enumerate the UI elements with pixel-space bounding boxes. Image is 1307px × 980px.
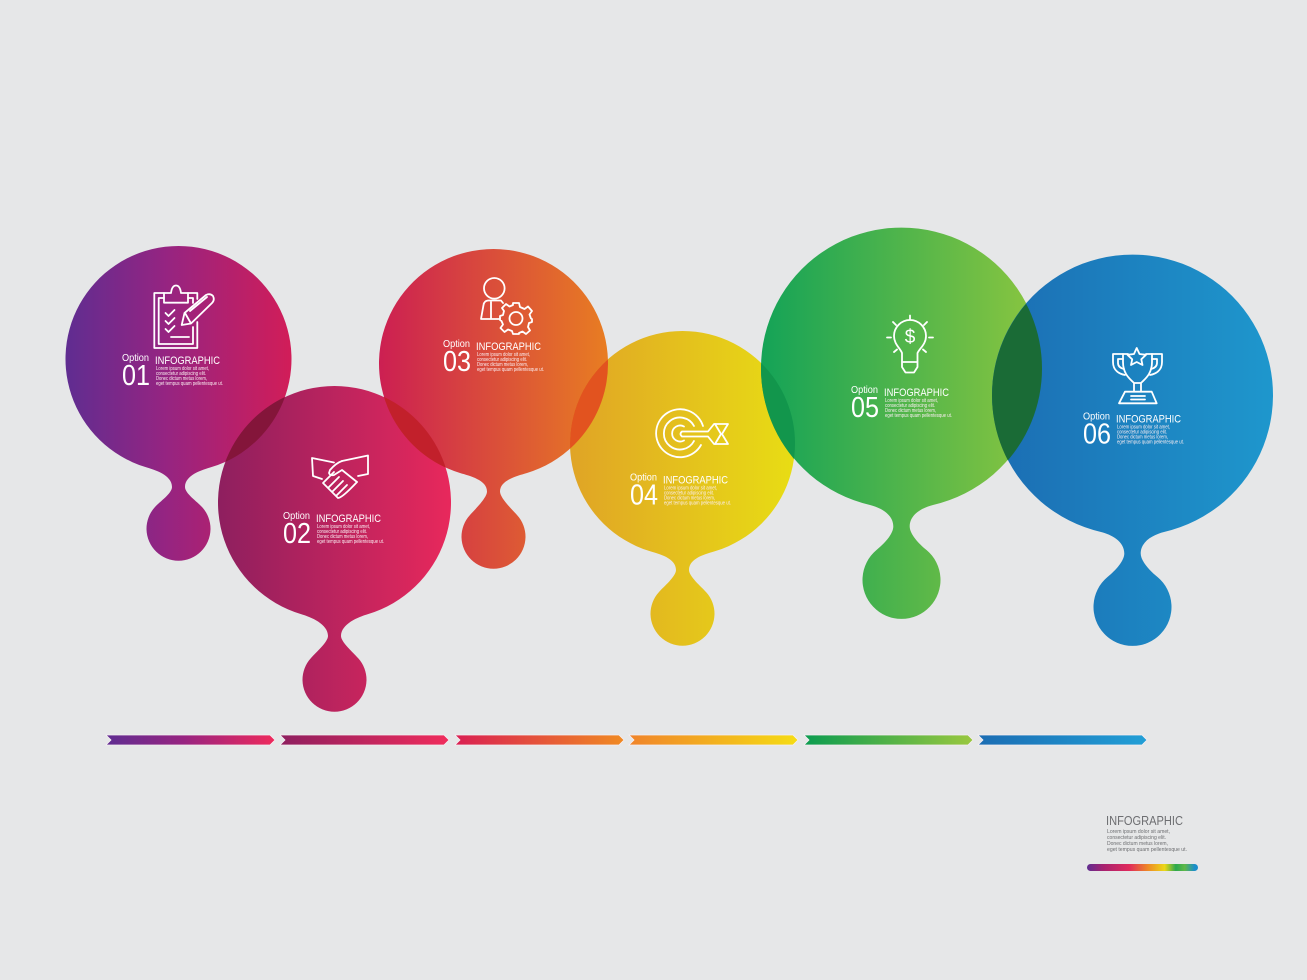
text: option 05	[851, 384, 952, 424]
overlap: bubbles 04 and 05	[761, 363, 795, 459]
panel: option 02	[218, 386, 451, 712]
text: option 03: INFOGRAPHIC	[476, 341, 541, 353]
arrow 6	[978, 735, 1147, 745]
text: option 02: Option	[283, 510, 310, 522]
text: option 01: eget tempus quam pellentesque ut.	[156, 381, 223, 387]
bubble 02	[218, 386, 451, 712]
bottom-right legend text: Donec dictum metus lorem,	[1107, 841, 1168, 847]
arrow 4	[629, 735, 798, 745]
panel: option 06	[992, 255, 1273, 646]
text: option 06: consectetur adipiscing elit.	[1117, 430, 1167, 436]
text: option 06: eget tempus quam pellentesque ut.	[1117, 440, 1184, 446]
bottom-right legend text: INFOGRAPHIC	[1106, 814, 1183, 828]
timeline arrows	[106, 735, 1147, 745]
text: option 06: Lorem ipsum dolor sit amet,	[1117, 424, 1170, 430]
text: option 06	[1083, 410, 1184, 450]
text: option 02: Lorem ipsum dolor sit amet,	[317, 524, 370, 530]
icon: trophy with star	[1113, 348, 1162, 403]
text: option 04: INFOGRAPHIC	[663, 474, 728, 486]
text: option 04: eget tempus quam pellentesque ut.	[664, 500, 731, 506]
text: option 01: INFOGRAPHIC	[155, 355, 220, 367]
bubble 05	[761, 228, 1042, 619]
text: option 04: 04	[630, 480, 658, 512]
text: option 01: Option	[122, 352, 149, 364]
text: option 02: consectetur adipiscing elit.	[317, 529, 367, 535]
text: option 01: consectetur adipiscing elit.	[156, 371, 206, 377]
icon: person with gear	[481, 278, 532, 334]
overlap: bubbles 01 and 02	[225, 397, 285, 462]
text: option 06: Option	[1083, 410, 1110, 422]
text: option 04: consectetur adipiscing elit.	[664, 490, 714, 496]
text: option 01: Lorem ipsum dolor sit amet,	[156, 366, 209, 372]
text: option 04: Donec dictum metus lorem,	[664, 496, 715, 502]
panel: option 04	[570, 331, 795, 646]
panel: option 05	[761, 228, 1042, 619]
text: option 05: Donec dictum metus lorem,	[885, 408, 936, 414]
arrow 1	[106, 735, 275, 745]
arrow 2	[280, 735, 449, 745]
text: option 04	[630, 472, 731, 512]
text: option 05: INFOGRAPHIC	[884, 387, 949, 399]
bubble 01	[66, 246, 292, 561]
text: option 05: 05	[851, 392, 879, 424]
text: option 02	[283, 510, 384, 550]
arrow 5	[804, 735, 973, 745]
text: option 05: Lorem ipsum dolor sit amet,	[885, 398, 938, 404]
panel: option 01	[66, 246, 292, 561]
text: option 03: consectetur adipiscing elit.	[477, 357, 527, 363]
text: option 01: 01	[122, 360, 150, 392]
bottom-right legend text: Lorem ipsum dolor sit amet,	[1107, 829, 1170, 835]
bottom-right legend text: consectetur adipiscing elit.	[1107, 835, 1166, 841]
text: option 01: Donec dictum metus lorem,	[156, 376, 207, 382]
bubble 06	[992, 255, 1273, 646]
icon: clipboard with pencil	[154, 286, 214, 348]
text: option 04: Option	[630, 472, 657, 484]
text: option 04: Lorem ipsum dolor sit amet,	[664, 486, 717, 492]
overlap: bubbles 02 and 03	[384, 397, 446, 468]
icon: handshake	[312, 456, 368, 498]
text: option 02: Donec dictum metus lorem,	[317, 534, 368, 540]
overlap: bubbles 05 and 06	[992, 304, 1042, 460]
icon: target with arrow	[656, 409, 728, 457]
arrow 3	[455, 735, 624, 745]
bubble 04	[570, 331, 795, 646]
text: option 05: consectetur adipiscing elit.	[885, 403, 935, 409]
text: option 03: Option	[443, 338, 470, 350]
text: option 01	[122, 352, 223, 392]
bottom-right legend text: eget tempus quam pellentesque ut.	[1107, 847, 1187, 853]
panel: option 03	[379, 249, 608, 569]
text: option 02: eget tempus quam pellentesque ut.	[317, 539, 384, 545]
text: option 05: eget tempus quam pellentesque ut.	[885, 413, 952, 419]
bottom-right legend text	[1106, 814, 1187, 853]
text: option 05: Option	[851, 384, 878, 396]
icon: light bulb with dollar: $	[905, 327, 916, 348]
icon: light bulb with dollar	[887, 316, 933, 372]
text: option 06: 06	[1083, 418, 1111, 450]
rainbow legend bar	[1087, 864, 1198, 871]
overlap: bubbles 03 and 04	[570, 359, 608, 448]
bubble 03	[379, 249, 608, 569]
text: option 03: Donec dictum metus lorem,	[477, 362, 528, 368]
text: option 06: Donec dictum metus lorem,	[1117, 434, 1168, 440]
text: option 03: Lorem ipsum dolor sit amet,	[477, 352, 530, 358]
text: option 02: INFOGRAPHIC	[316, 513, 381, 525]
text: option 03: eget tempus quam pellentesque ut.	[477, 367, 544, 373]
text: option 03	[443, 338, 544, 378]
text: option 02: 02	[283, 518, 311, 550]
text: option 06: INFOGRAPHIC	[1116, 414, 1181, 426]
text: option 03: 03	[443, 346, 471, 378]
